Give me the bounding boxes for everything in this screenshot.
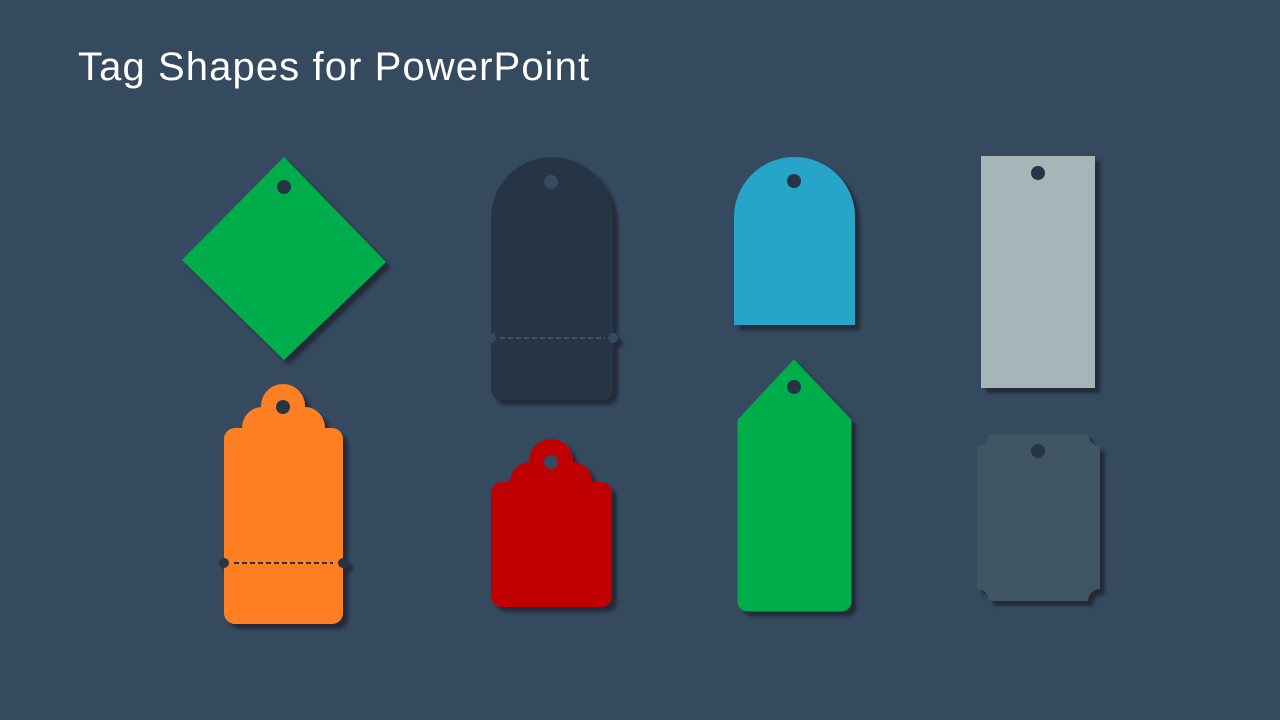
tag: orange scalloped ticket [219,384,348,624]
tag: light grey rectangle [981,156,1095,388]
tag: green pointed [738,360,851,611]
tag: slate concave-corner [977,434,1100,601]
tag: green diamond [182,157,386,360]
tag: blue arch [734,157,855,325]
tag: red scalloped [491,439,612,607]
tag: dark navy arched ticket [486,157,618,400]
title: Tag Shapes for PowerPoint [78,45,590,89]
